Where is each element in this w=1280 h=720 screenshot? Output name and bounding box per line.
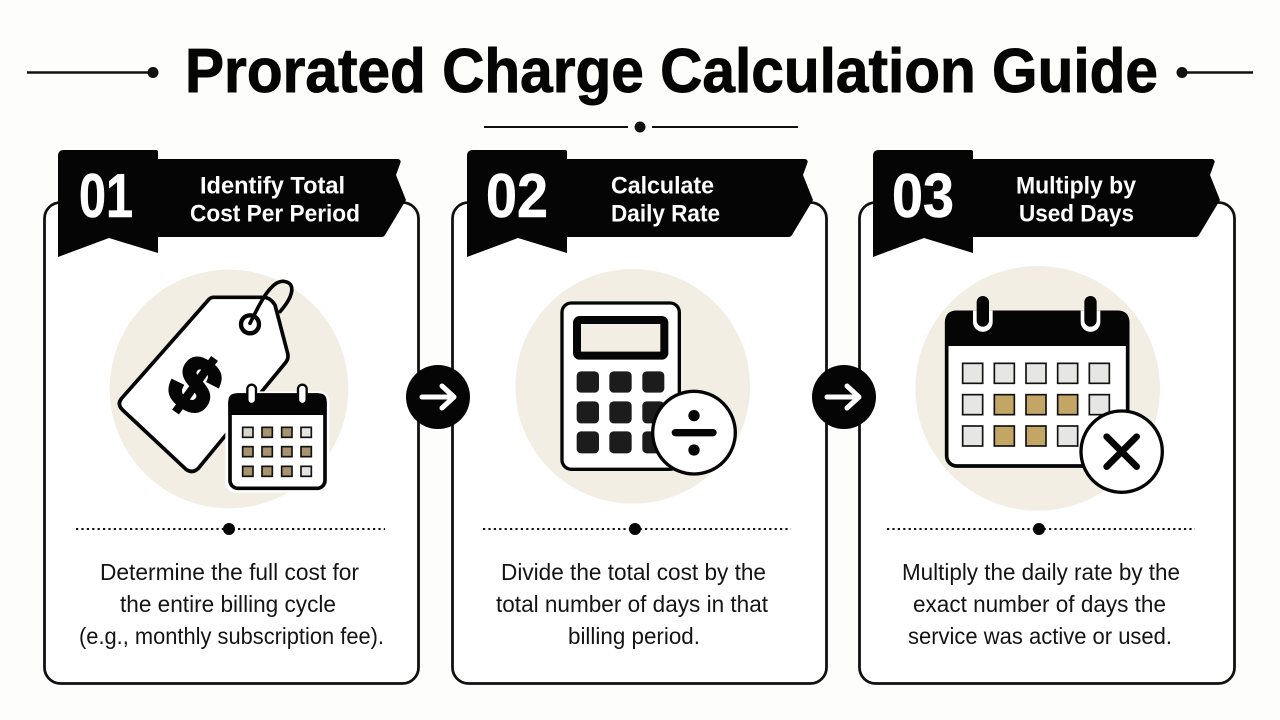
card 2 outline bbox=[452, 202, 826, 684]
title underline bbox=[484, 122, 798, 132]
step 3 heading: Multiply by bbox=[1016, 172, 1136, 200]
step 2 description: billing period. bbox=[568, 623, 700, 649]
step 3 heading: Used Days bbox=[1019, 200, 1134, 228]
step 2 number: 02 bbox=[486, 162, 548, 231]
step 1 number flag bbox=[58, 150, 158, 257]
calendar day cells bbox=[963, 363, 1109, 446]
step 2 description bbox=[496, 559, 768, 649]
step 1 description: the entire billing cycle bbox=[120, 591, 336, 617]
icon background circle bbox=[110, 270, 348, 508]
calendar body bbox=[947, 312, 1128, 466]
step 1 heading: Identify Total bbox=[200, 172, 345, 200]
dollar sign: $ bbox=[153, 338, 237, 432]
icon background circle bbox=[515, 269, 750, 504]
card 3 outline bbox=[860, 202, 1234, 684]
calculator screen bbox=[577, 320, 664, 356]
calculator keys bbox=[577, 371, 664, 453]
step 3 divider bbox=[887, 523, 1195, 535]
tag hole bbox=[241, 315, 259, 333]
calendar header bbox=[945, 311, 1129, 346]
divide badge bbox=[653, 391, 735, 474]
panel: step 2 bbox=[452, 150, 826, 684]
calculator body bbox=[562, 303, 679, 469]
panel: step 1 bbox=[44, 150, 418, 684]
icon background circle bbox=[915, 266, 1160, 511]
small calendar bbox=[225, 385, 329, 493]
tag string bbox=[250, 281, 292, 323]
title ornament: left bbox=[27, 67, 158, 78]
multiply badge bbox=[1081, 411, 1162, 492]
step 2 heading: Calculate bbox=[611, 172, 714, 200]
step 2 heading banner bbox=[567, 159, 813, 237]
calendar rings bbox=[973, 296, 1100, 332]
card 1 outline bbox=[44, 202, 418, 684]
step 3 description: service was active or used. bbox=[908, 623, 1172, 649]
step 2 description: Divide the total cost by the bbox=[501, 559, 766, 585]
step 3 number flag bbox=[873, 150, 973, 257]
icon: calculator with divide sign bbox=[515, 269, 750, 504]
step 1 heading banner bbox=[158, 159, 406, 237]
step 2 divider bbox=[483, 523, 791, 535]
step 2 heading: Daily Rate bbox=[611, 200, 720, 228]
step 3 description: exact number of days the bbox=[913, 591, 1166, 617]
icon: calendar with multiply sign bbox=[915, 266, 1162, 511]
arrow: step 1 to step 2 bbox=[406, 365, 470, 429]
step 1 divider bbox=[76, 523, 385, 535]
step 3 heading bbox=[1016, 172, 1136, 228]
price tag bbox=[119, 297, 288, 471]
step 1 number: 01 bbox=[79, 162, 133, 231]
arrow: step 2 to step 3 bbox=[812, 365, 876, 429]
step 3 number: 03 bbox=[892, 162, 954, 231]
step 3 description: Multiply the daily rate by the bbox=[902, 559, 1180, 585]
step 2 heading bbox=[611, 172, 720, 228]
step 1 heading: Cost Per Period bbox=[190, 200, 360, 228]
step 1 description: (e.g., monthly subscription fee). bbox=[79, 623, 384, 649]
step 3 description bbox=[902, 559, 1180, 649]
step 1 description bbox=[79, 559, 384, 649]
step 1 description: Determine the full cost for bbox=[100, 559, 359, 585]
step 1 heading bbox=[190, 172, 360, 228]
title: Prorated Charge Calculation Guide bbox=[185, 37, 1158, 106]
panel: step 3 bbox=[860, 150, 1234, 684]
step 2 description: total number of days in that bbox=[496, 591, 768, 617]
icon: price tag and calendar bbox=[110, 270, 348, 508]
step 2 number flag bbox=[467, 150, 567, 257]
step 3 heading banner bbox=[973, 159, 1220, 237]
title ornament: right bbox=[1176, 67, 1253, 78]
